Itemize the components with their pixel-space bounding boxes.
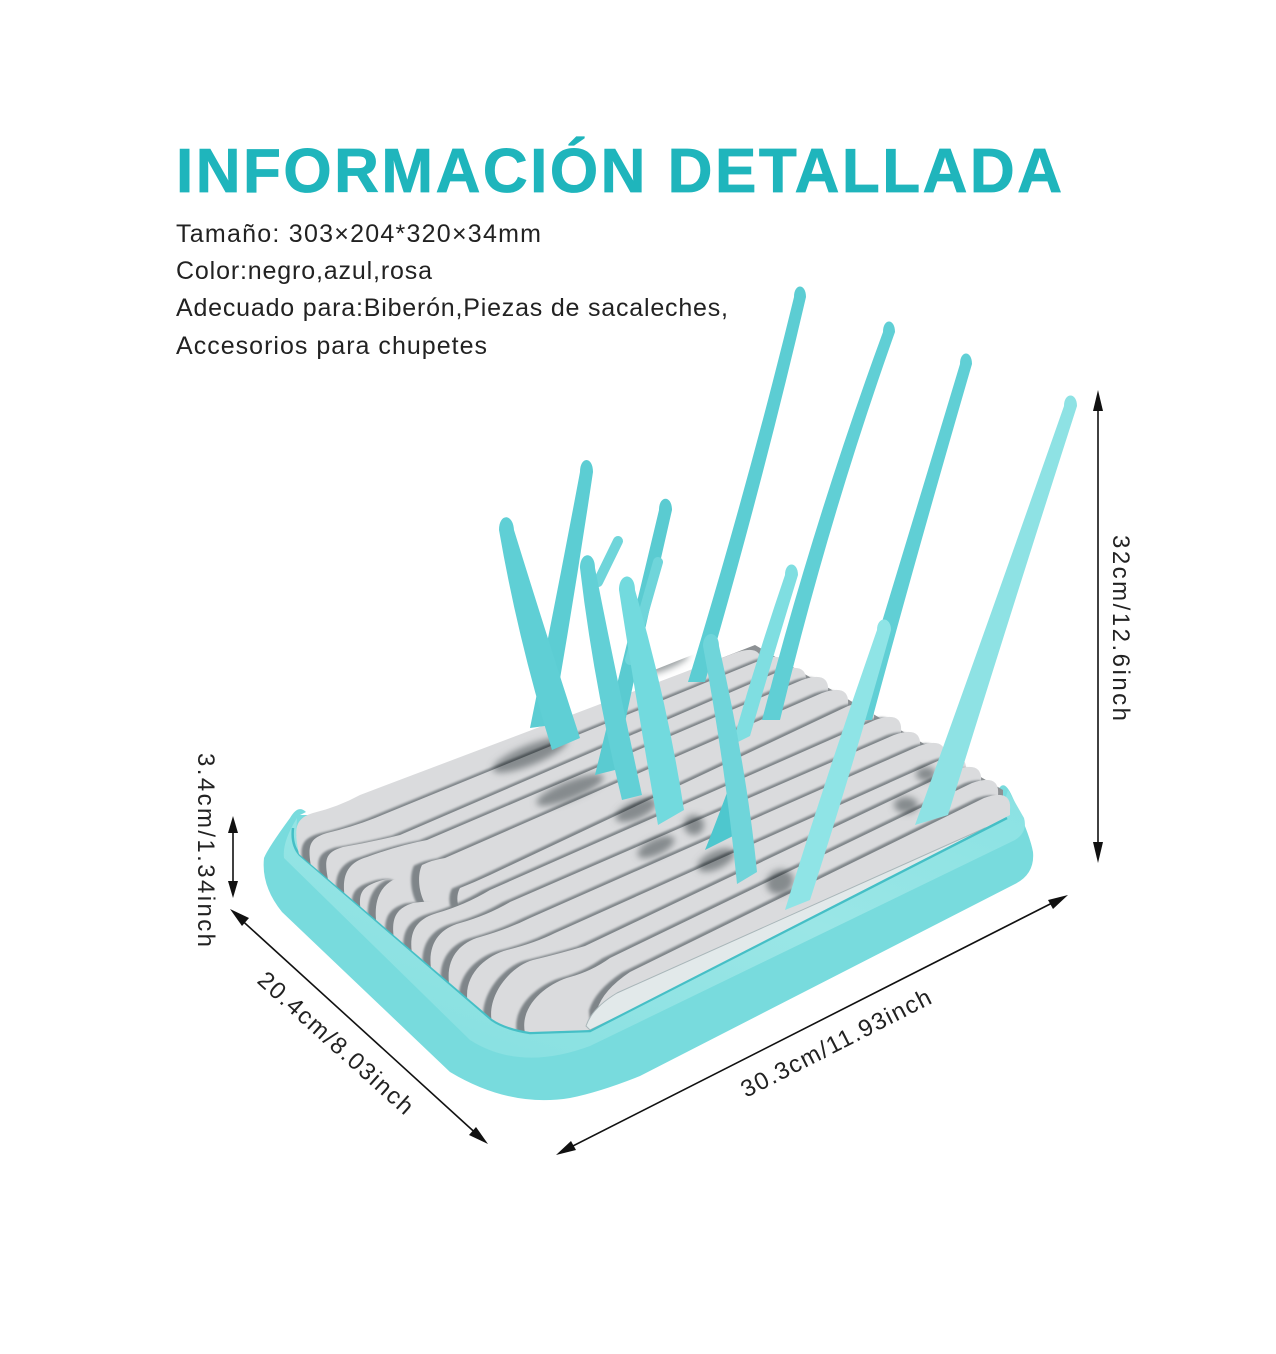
arrow: length [556, 895, 1068, 1155]
product description text: Tamaño: 303×204*320×34mm [176, 220, 541, 248]
product: drying rack [264, 286, 1077, 1100]
infographic canvas [176, 136, 1130, 1155]
teal drying stalks [499, 286, 1077, 910]
title: INFORMACIÓN DETALLADA [176, 137, 1062, 206]
label: width: 20.4cm/8.03inch [252, 966, 419, 1120]
label: tray depth: 3.4cm/1.34inch [192, 753, 219, 947]
arrow: height [1093, 390, 1103, 863]
product description text: Accesorios para chupetes [176, 332, 487, 360]
product description text [176, 220, 728, 360]
label: height: 32cm/12.6inch [1107, 535, 1134, 721]
arrow: tray depth [228, 816, 238, 898]
product description text: Color:negro,azul,rosa [176, 257, 432, 285]
label: length: 30.3cm/11.93inch [736, 984, 936, 1103]
product description text: Adecuado para:Biberón,Piezas de sacaleches, [176, 294, 728, 322]
arrow: width [230, 909, 488, 1144]
grey drying slats [296, 645, 1010, 1056]
tray base [264, 785, 1033, 1100]
